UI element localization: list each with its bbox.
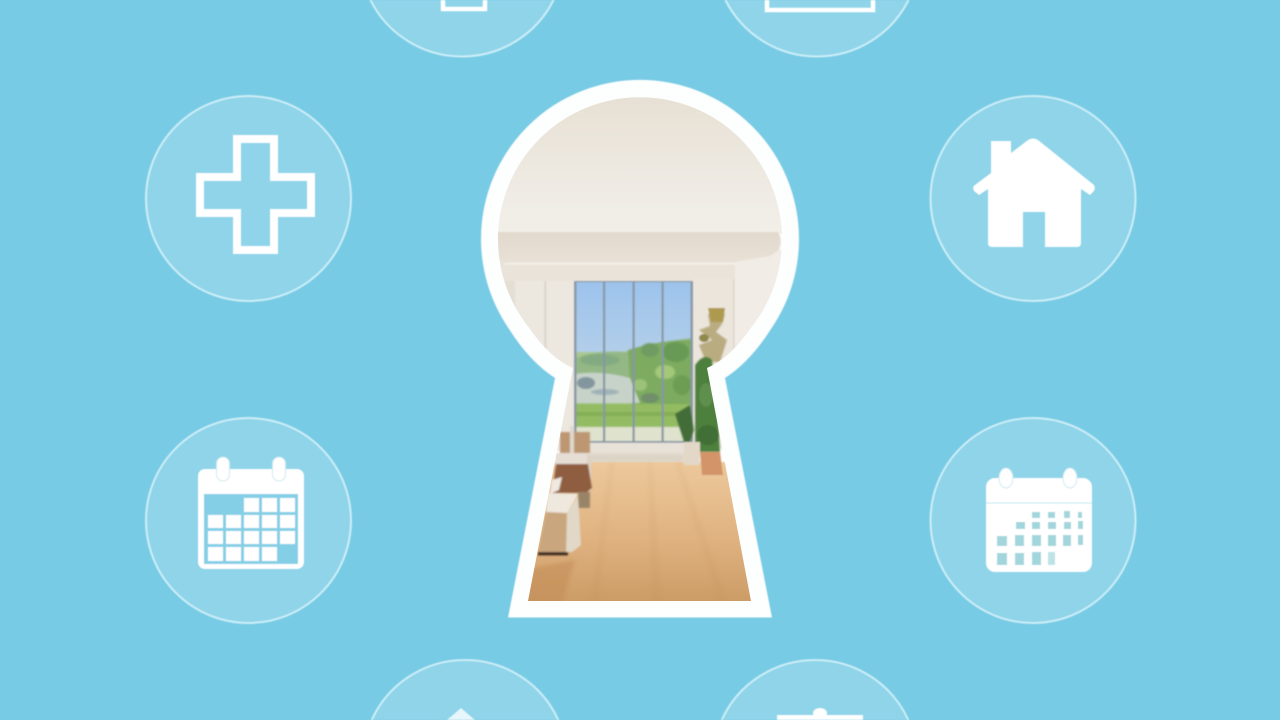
icon circle: top right, frame (725, 0, 909, 57)
icon circle: house (930, 96, 1136, 301)
icon circle: calendar left (146, 418, 351, 623)
upper wall band (490, 262, 735, 281)
plants and pots (675, 308, 727, 475)
icon circle: bottom right, calendar top (722, 660, 908, 720)
icon: cross outline (200, 139, 311, 250)
keyhole white frame (481, 80, 799, 618)
icon: solid calendar (986, 468, 1092, 572)
icon circle: top left, document (370, 0, 554, 57)
wooden floor (528, 461, 751, 601)
keyhole room scene (490, 90, 790, 610)
ceiling beam (490, 232, 781, 262)
wall beside window right (692, 279, 735, 449)
sky through window (576, 281, 692, 353)
icon circle: calendar right (930, 418, 1136, 623)
icon: house (973, 138, 1095, 247)
ceiling (490, 90, 790, 234)
left furniture (538, 426, 592, 556)
wall beside window left (514, 280, 574, 452)
icon circle: bottom left, home roof (372, 660, 558, 720)
window sill (588, 443, 684, 462)
infographic canvas (144, 0, 1137, 720)
window mullions (574, 281, 693, 443)
green hillside view (575, 338, 692, 442)
right side wall (734, 250, 782, 348)
icon: calendar outline with grid (198, 457, 304, 569)
icon circle: medical cross (146, 96, 351, 301)
